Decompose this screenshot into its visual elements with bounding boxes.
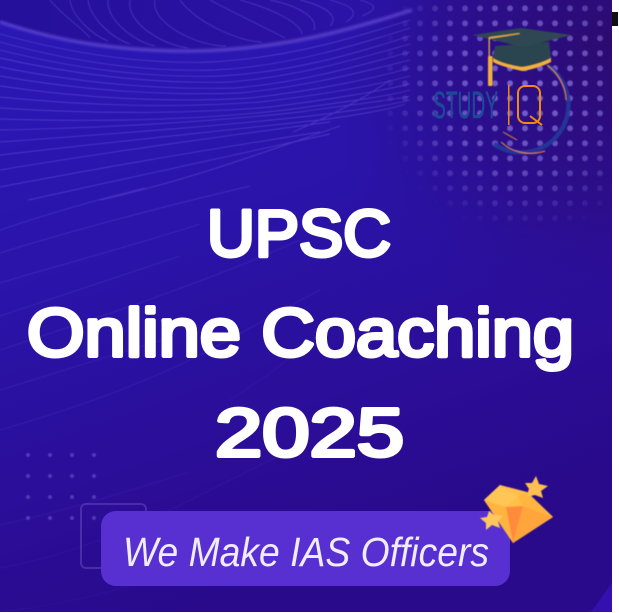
outline square behind pill xyxy=(81,504,146,568)
title xyxy=(27,196,574,471)
icon: star top xyxy=(525,476,548,498)
swoosh highlight xyxy=(0,10,412,51)
title line 3: 2025 xyxy=(215,395,404,471)
icon: graduation cap xyxy=(472,28,572,86)
icon: ring xyxy=(494,65,568,153)
tagline text: We Make IAS Officers xyxy=(123,529,489,575)
icon: star left xyxy=(480,511,503,530)
title line 1: UPSC xyxy=(207,196,391,270)
text: IQ mark xyxy=(518,86,542,125)
bottom-right corner accent xyxy=(590,583,612,612)
logo: Study IQ xyxy=(433,28,572,153)
wave lines xyxy=(0,0,410,612)
black edge mark xyxy=(612,12,618,26)
bottom-left dots xyxy=(26,453,96,520)
divider bar xyxy=(508,85,510,125)
text: STUDY: STUDY xyxy=(433,85,498,127)
title line 2: Online Coaching xyxy=(27,295,574,371)
dot grid xyxy=(388,4,604,221)
icon: diamond with stars xyxy=(480,476,553,543)
tagline pill xyxy=(101,511,510,586)
